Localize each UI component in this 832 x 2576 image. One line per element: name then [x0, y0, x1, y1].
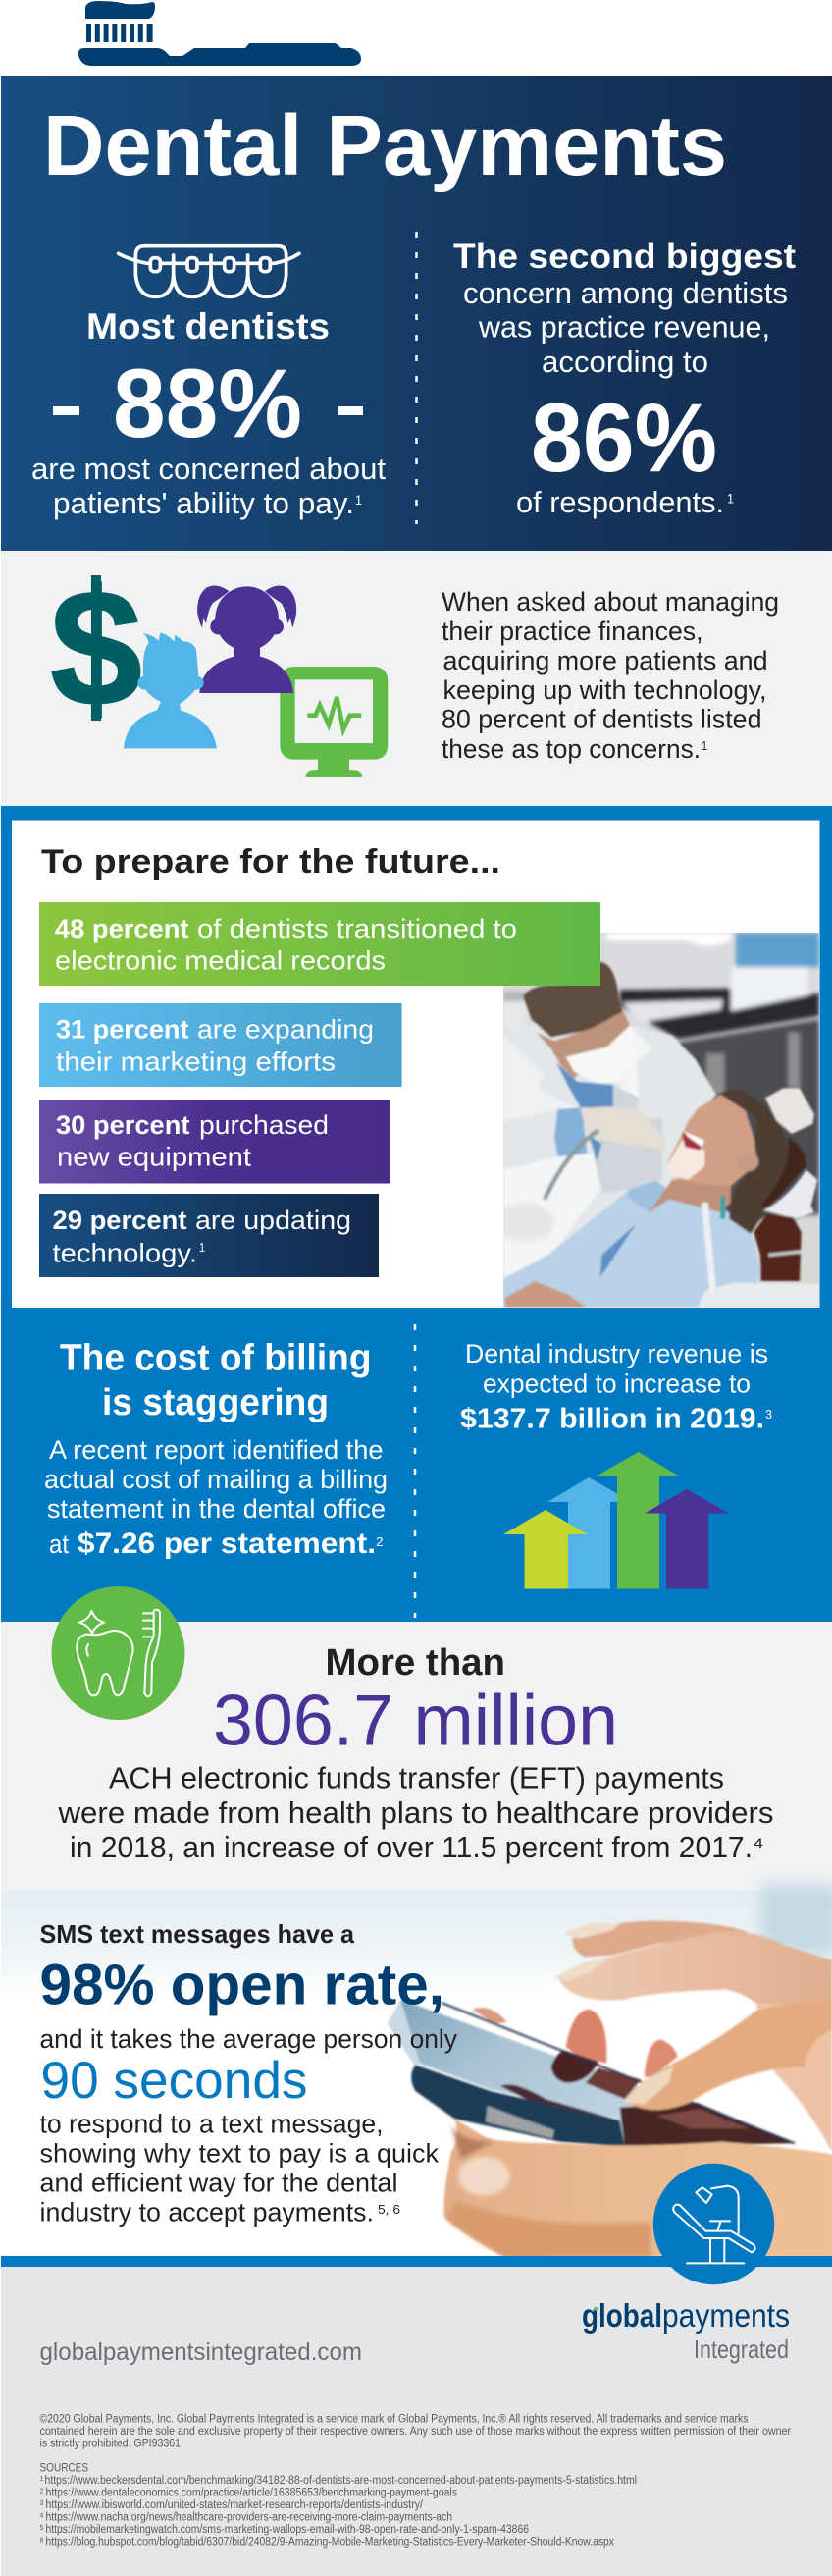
text: cost of billing: $7.26 per statement. [78, 1528, 376, 1560]
icon: braces [119, 246, 299, 296]
bar: 29 percent: 1 [199, 1240, 205, 1255]
bar: 29 percent: technology. [53, 1239, 197, 1268]
photo: dentist and patient [495, 933, 819, 1308]
text: SMS open rate: 98% open rate, [39, 1954, 444, 2016]
bar: 31 percent: 31 percent [56, 1015, 188, 1045]
text: cost of billing: statement in the dental office [47, 1494, 386, 1524]
stat: 306.7 million: More than [326, 1642, 505, 1684]
stat: most dentists 88%: are most concerned about [31, 452, 386, 486]
text: SMS open rate: to respond to a text message, [39, 2109, 383, 2138]
text: SMS open rate: SMS text messages have a [39, 1919, 355, 1949]
text: legal copyright: ©2020 Global Payments, Inc. Global Payments Integrated is a service mark of Global Payments, Inc.® All rights reserved. All trademarks and service marks [39, 2413, 749, 2425]
stat: second biggest 86%: of respondents. [516, 485, 724, 519]
text: finance concerns: their practice finances, [442, 617, 702, 646]
bar: 31 percent: their marketing efforts [56, 1046, 336, 1076]
stat: second biggest 86%: The second biggest [453, 238, 796, 276]
text: sources: 1 [39, 2476, 43, 2483]
bar: 48 percent: 48 percent [55, 914, 188, 943]
text: legal copyright [39, 2413, 791, 2450]
icon: dental chair [653, 2164, 774, 2284]
bar: 31 percent [39, 1003, 402, 1087]
stat: second biggest 86%: concern among dentists [463, 276, 788, 310]
bar: 48 percent: electronic medical records [55, 946, 386, 976]
bar: 30 percent [39, 1100, 390, 1184]
text: cost of billing: A recent report identified the [49, 1435, 384, 1465]
text: finance concerns: 1 [702, 738, 707, 753]
text: industry revenue [460, 1339, 772, 1435]
bar: 48 percent [39, 902, 600, 986]
text: sources: 3 [39, 2500, 43, 2507]
text: SMS open rate: showing why text to pay is a quick [39, 2138, 440, 2168]
text: ACH description: ACH electronic funds transfer (EFT) payments [109, 1761, 724, 1795]
text: sources: 4 [39, 2513, 43, 2519]
text: ACH description: were made from health plans to healthcare providers [57, 1797, 773, 1830]
bar: 29 percent [39, 1194, 379, 1277]
text: ACH description [57, 1761, 773, 1864]
text: sources: 2 [39, 2488, 43, 2496]
bar: 30 percent: purchased [199, 1110, 329, 1140]
bar: 31 percent: are expanding [197, 1015, 374, 1045]
stat: most dentists 88%: 88% [113, 349, 302, 457]
logo: global payments integrated: global [582, 2297, 662, 2334]
text: sources: https://www.beckersdental.com/benchmarking/34182-88-of-dentists-are-most-concerned-about-patients-payments-5-statistics.html [45, 2475, 637, 2487]
text: finance concerns: keeping up with technology, [443, 675, 767, 705]
text: legal copyright: contained herein are the sole and exclusive property of their respective owners. Any such use of those marks without the express written permission of their owner [39, 2426, 791, 2438]
text: cost of billing: at [49, 1530, 69, 1559]
text: SMS open rate: 90 seconds [41, 2052, 308, 2110]
stat: second biggest 86%: was practice revenue, [478, 310, 770, 344]
stat: 306.7 million [213, 1642, 618, 1761]
text: ACH description: 4 [754, 1835, 763, 1851]
bar: 48 percent: of dentists transitioned to [197, 914, 517, 943]
text: industry revenue: expected to increase to [483, 1368, 751, 1398]
panel: header [1, 76, 832, 551]
website url: globalpaymentsintegrated.com [39, 2338, 362, 2366]
text: SMS open rate: and efficient way for the dental [39, 2168, 398, 2197]
stat: second biggest 86%: 1 [727, 491, 734, 507]
text: cost of billing: The cost of billing [60, 1337, 371, 1378]
text: finance concerns [442, 587, 779, 764]
stat: most dentists 88% [31, 306, 386, 520]
icon: girl silhouette [197, 586, 296, 693]
bar: 30 percent: new equipment [57, 1143, 252, 1172]
bar: 30 percent: 30 percent [56, 1110, 190, 1140]
panel: top concerns [1, 551, 832, 806]
icon: monitor with pulse [280, 667, 388, 777]
icon: boy silhouette [124, 632, 217, 748]
icon: toothbrush [78, 1, 361, 66]
icon: dollar sign: $ [50, 556, 142, 740]
text: sources: 5 [39, 2525, 43, 2532]
text: SMS open rate: industry to accept payments. [39, 2197, 374, 2227]
stat: most dentists 88%: 1 [355, 492, 362, 508]
text: ACH description: in 2018, an increase of over 11.5 percent from 2017. [70, 1831, 753, 1864]
text: industry revenue: Dental industry revenue is [465, 1339, 768, 1368]
bar: 29 percent: 29 percent [53, 1206, 186, 1235]
text: sources: https://blog.hubspot.com/blog/tabid/6307/bid/24082/9-Amazing-Mobile-Marketing-Statistics-Every-Marketer-Should-Know.aspx [45, 2537, 614, 2549]
text: sources: https://www.nacha.org/news/healthcare-providers-are-receiving-more-claim-payments-ach [45, 2511, 452, 2523]
text: SMS open rate: 5, 6 [378, 2202, 400, 2217]
text: industry revenue: $137.7 billion in 2019. [460, 1404, 764, 1435]
text: cost of billing [44, 1337, 388, 1560]
heading: prepare: To prepare for the future... [41, 843, 500, 881]
text: industry revenue: 3 [765, 1407, 772, 1422]
text: SMS open rate [39, 1919, 458, 2227]
photo: hands holding phone [388, 1921, 832, 2258]
text: cost of billing: actual cost of mailing a billing [44, 1465, 388, 1494]
bar: 29 percent: are updating [195, 1206, 351, 1235]
stat: most dentists 88%: patients' ability to pay. [53, 486, 354, 520]
panel: SMS text messages [1, 1885, 832, 2258]
stat: second biggest 86%: 86% [531, 383, 717, 492]
panel: ACH payments [1, 1586, 832, 1891]
text: sources [39, 2462, 637, 2549]
chart: rising arrows [503, 1452, 728, 1588]
text: finance concerns: When asked about managing [442, 587, 779, 617]
text: cost of billing: is staggering [102, 1382, 329, 1423]
text: finance concerns: 80 percent of dentists listed [442, 705, 761, 734]
panel: footer [1, 2164, 832, 2576]
icon: tooth and toothbrush [51, 1586, 184, 1720]
text: sources: https://www.dentaleconomics.com/practice/article/16385653/benchmarking-payment-goals [45, 2488, 457, 2499]
stat: most dentists 88%: Most dentists [86, 306, 330, 347]
text: finance concerns: acquiring more patients and [443, 646, 767, 675]
text: legal copyright: is strictly prohibited. GPI93361 [39, 2439, 181, 2450]
stat: second biggest 86%: according to [542, 345, 708, 379]
logo: global payments integrated: payments [662, 2297, 790, 2334]
text: sources: SOURCES [39, 2462, 88, 2474]
stat: 306.7 million: 306.7 million [213, 1681, 618, 1761]
text: sources: 6 [39, 2537, 43, 2545]
text: finance concerns: these as top concerns. [442, 734, 701, 764]
text: cost of billing: 2 [376, 1534, 383, 1549]
panel: prepare for the future [1, 806, 832, 1622]
text: SMS open rate: and it takes the average person only [39, 2024, 458, 2054]
logo: global payments integrated: Integrated [694, 2334, 789, 2364]
stat: second biggest 86% [453, 238, 796, 519]
title: Dental Payments [43, 98, 727, 193]
logo: global payments integrated [582, 2297, 790, 2364]
text: sources: https://mobilemarketingwatch.com/sms-marketing-wallops-email-with-98-open-rate-and-only-1-spam-43866 [45, 2524, 529, 2536]
text: sources: https://www.ibisworld.com/united-states/market-research-reports/dentists-industry/ [45, 2499, 424, 2511]
